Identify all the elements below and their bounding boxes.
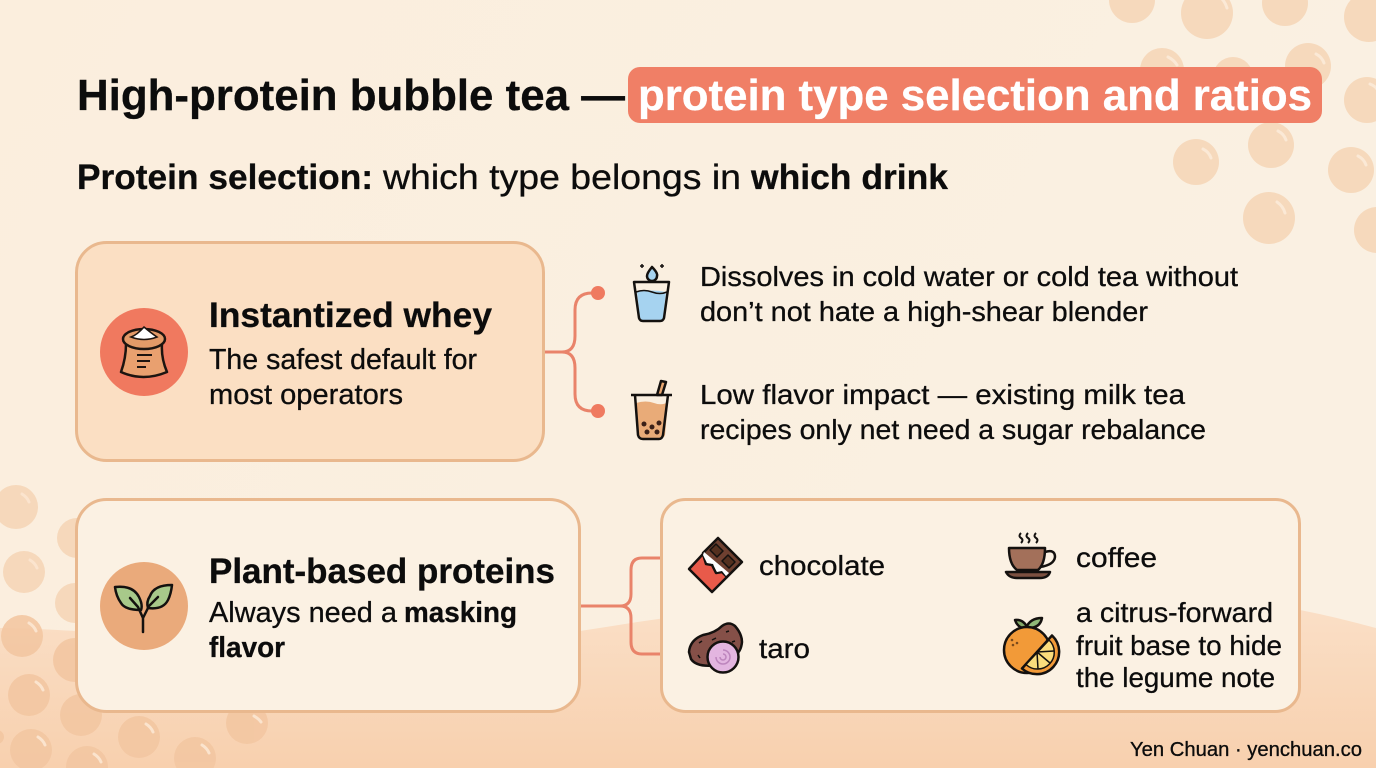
icon: taro	[689, 624, 742, 672]
title	[77, 67, 1322, 123]
label: citrus-forward fruit base: the legume note	[1076, 662, 1275, 693]
decorative bubbles: bottom left	[0, 485, 268, 768]
panel: masking flavors	[662, 500, 1300, 712]
panel: instantized whey	[76, 242, 544, 460]
label: chocolate: chocolate	[759, 550, 885, 581]
benefit text: low flavor impact: Low flavor impact — existing milk tea	[700, 379, 1185, 410]
benefit text: low flavor impact: recipes only net need a sugar rebalance	[700, 414, 1206, 445]
decorative bubbles: top right	[1109, 0, 1376, 253]
panel text: Always need a	[209, 597, 398, 629]
label: citrus-forward fruit base	[1076, 597, 1282, 693]
benefit text: dissolves: don’t not hate a high-shear blender	[700, 296, 1148, 327]
panel text: masking	[404, 597, 517, 629]
panel heading: Plant-based proteins	[209, 552, 555, 591]
panel text: The safest default for	[209, 344, 477, 376]
benefit text: low flavor impact	[700, 379, 1206, 445]
subtitle: which drink	[750, 158, 949, 197]
benefit text: dissolves	[700, 261, 1238, 327]
label: citrus-forward fruit base: fruit base to hide	[1076, 630, 1282, 661]
subtitle: which type belongs in	[382, 158, 741, 197]
icon: citrus orange	[1004, 618, 1059, 674]
icon: bubble milk tea	[631, 381, 672, 439]
panel text	[209, 597, 517, 664]
connector: whey to benefits	[545, 286, 605, 418]
subtitle	[77, 158, 949, 197]
footer credit: Yen Chuan · yenchuan.co	[1130, 739, 1362, 761]
icon: protein powder sack	[100, 308, 188, 396]
title highlight: protein type selection and ratios: protein type selection and ratios	[638, 71, 1312, 120]
label: citrus-forward fruit base: a citrus-forward	[1076, 597, 1273, 628]
icon: glass of water	[634, 264, 669, 321]
panel text: most operators	[209, 379, 403, 411]
icon: plant sprout	[100, 562, 188, 650]
benefit text: dissolves: Dissolves in cold water or cold tea without	[700, 261, 1238, 292]
panel text: flavor	[209, 632, 285, 664]
panel text	[209, 344, 477, 411]
icon: coffee cup	[1006, 533, 1055, 578]
title: High-protein bubble tea —	[77, 71, 625, 120]
label: coffee: coffee	[1076, 542, 1157, 573]
label: taro: taro	[759, 633, 810, 664]
icon: chocolate bar	[689, 538, 742, 592]
panel heading: Instantized whey	[209, 296, 493, 335]
subtitle: Protein selection:	[77, 158, 373, 197]
connector: plant proteins to flavors	[581, 558, 661, 654]
panel: plant-based proteins	[76, 500, 580, 712]
